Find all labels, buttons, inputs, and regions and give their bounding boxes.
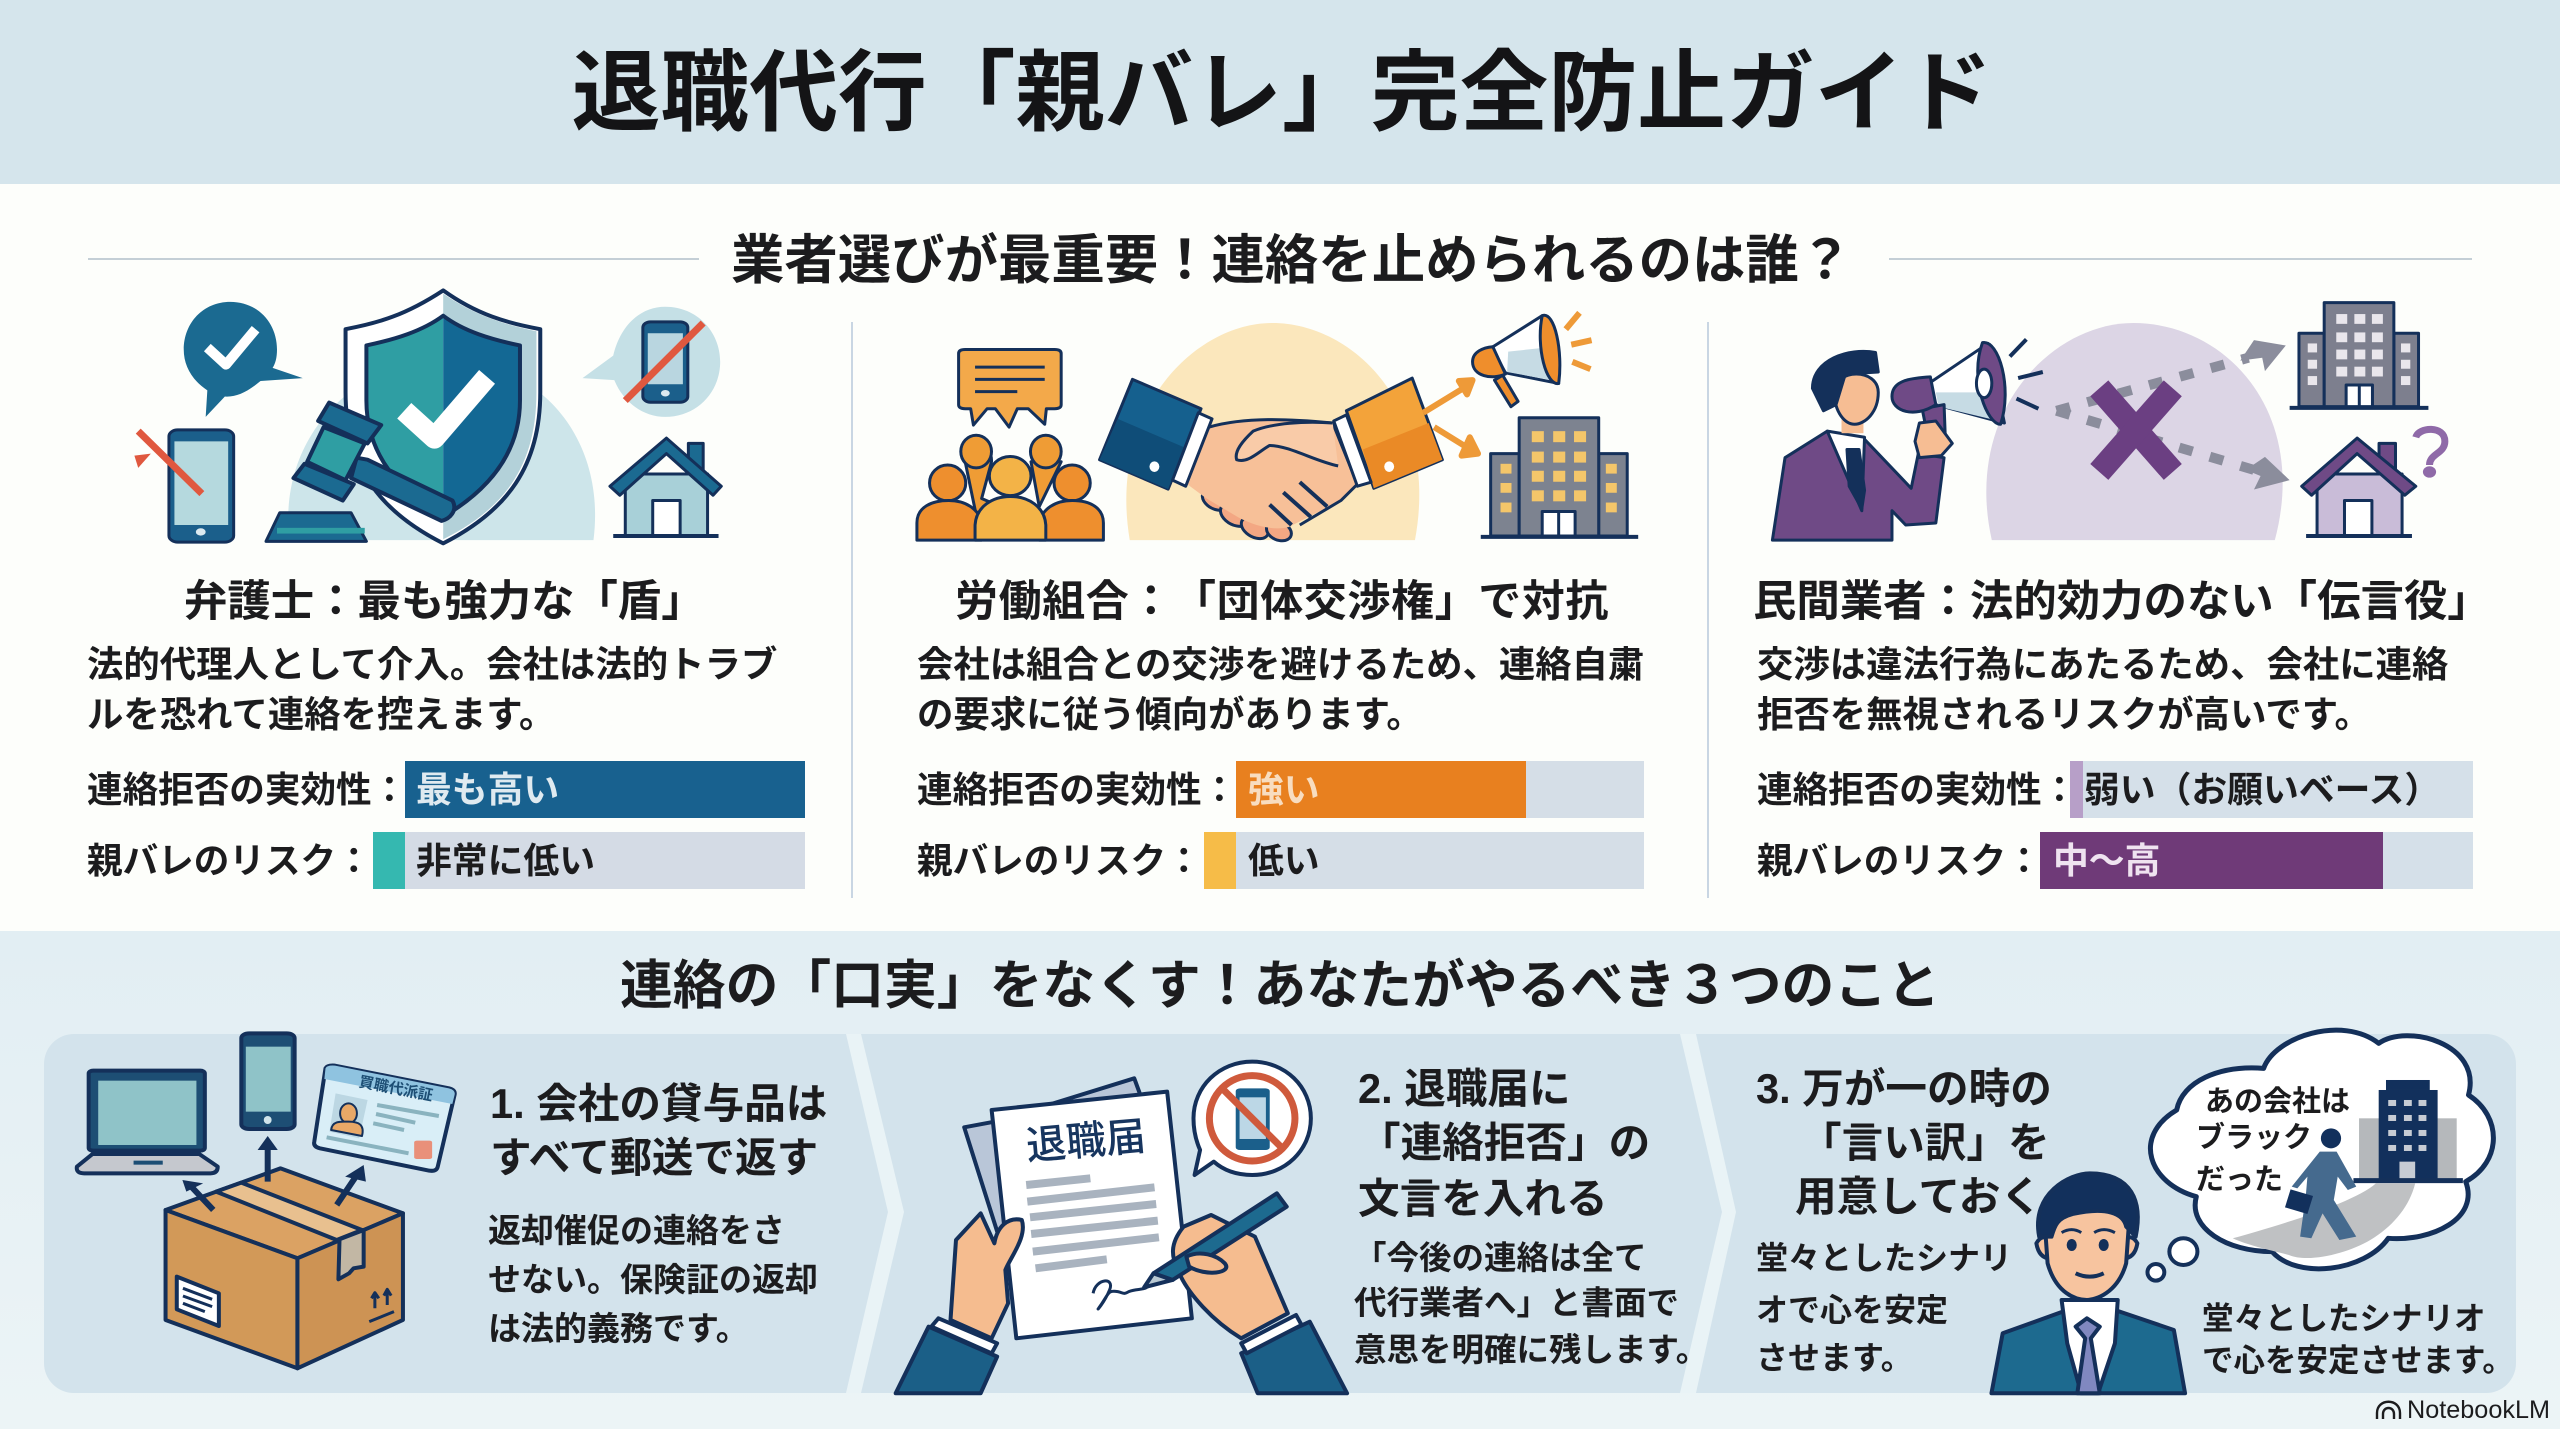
step 2: no-contact wording bbox=[896, 1062, 1708, 1393]
step 3: prepare an excuse bbox=[1756, 1030, 2514, 1393]
illustration: man with megaphone, blocked messages bbox=[1772, 303, 2445, 540]
step description: 意思を明確に残します。 bbox=[1354, 1332, 1708, 1368]
title: 退職代行「親バレ」完全防止ガイド bbox=[572, 44, 1992, 142]
panel heading: 労働組合：「団体交渉権」で対抗 bbox=[955, 578, 1609, 626]
meter: contact refusal: 連絡拒否の実効性： bbox=[87, 770, 407, 810]
meter: parent risk: 親バレのリスク： bbox=[917, 841, 1202, 881]
meter: contact refusal bbox=[917, 761, 1644, 818]
step 1: return loaned items bbox=[77, 1033, 827, 1368]
cloud text: あの会社は bbox=[2205, 1085, 2350, 1118]
illustration: box, laptop, phone, ID card bbox=[77, 1033, 455, 1368]
step title: 「言い訳」を bbox=[1800, 1118, 2050, 1166]
ID card label: 買職代派証 bbox=[357, 1074, 434, 1105]
meter: parent risk bbox=[1757, 832, 2473, 889]
meter: contact refusal: 連絡拒否の実効性： bbox=[917, 770, 1237, 810]
meter: contact refusal: 弱い（お願いベース） bbox=[2084, 770, 2440, 810]
description: の要求に従う傾向があります。 bbox=[917, 694, 1423, 734]
step description left: させます。 bbox=[1756, 1340, 1913, 1376]
panel heading: 民間業者：法的効力のない「伝言役」 bbox=[1753, 578, 2491, 626]
meter: parent risk: 中〜高 bbox=[2053, 841, 2160, 881]
illustration: thinking man with cloud bbox=[1991, 1030, 2493, 1393]
section heading: choosing a provider: 業者選びが最重要！連絡を止められるのは誰？ bbox=[731, 232, 1852, 290]
meter: parent risk: 非常に低い bbox=[416, 841, 595, 881]
meter: parent risk: 親バレのリスク： bbox=[1757, 841, 2042, 881]
steps band bbox=[44, 1034, 2516, 1393]
meter: parent risk: 低い bbox=[1248, 841, 1320, 881]
panel heading: 弁護士：最も強力な「盾」 bbox=[184, 578, 705, 626]
step title: 1. 会社の貸与品は bbox=[490, 1080, 827, 1126]
step description: は法的義務です。 bbox=[488, 1310, 749, 1346]
step title: 用意しておく bbox=[1795, 1172, 2042, 1220]
section: three things to do bbox=[0, 931, 2560, 1429]
meter: parent risk bbox=[917, 832, 1644, 889]
description: ルを恐れて連絡を控えます。 bbox=[87, 694, 555, 734]
cloud text: ブラック bbox=[2196, 1120, 2312, 1154]
step title: 3. 万が一の時の bbox=[1756, 1064, 2052, 1112]
step description: せない。保険証の返却 bbox=[488, 1260, 818, 1298]
meter: contact refusal bbox=[1757, 761, 2473, 818]
description: 拒否を無視されるリスクが高いです。 bbox=[1757, 694, 2371, 734]
panel: lawyer bbox=[87, 290, 805, 889]
cloud text: だった bbox=[2196, 1164, 2283, 1196]
step title: 文言を入れる bbox=[1358, 1174, 1608, 1222]
meter: parent risk: 親バレのリスク： bbox=[87, 841, 372, 881]
illustration: resignation letter, hands, no-phone bubble bbox=[896, 1062, 1347, 1393]
step title: 「連絡拒否」の bbox=[1359, 1118, 1650, 1166]
description: 交渉は違法行為にあたるため、会社に連絡 bbox=[1757, 644, 2448, 684]
step description: 代行業者へ」と書面で bbox=[1354, 1285, 1679, 1321]
step description: 返却催促の連絡をさ bbox=[488, 1212, 785, 1248]
document title: 退職届 bbox=[1024, 1115, 1148, 1169]
panel: private provider bbox=[1753, 303, 2491, 889]
NotebookLM watermark: NotebookLM bbox=[2407, 1396, 2550, 1424]
step title: すべて郵送で返す bbox=[490, 1134, 818, 1180]
step description right: 堂々としたシナリオ bbox=[2202, 1300, 2486, 1336]
step title: 2. 退職届に bbox=[1358, 1064, 1571, 1112]
step description right: で心を安定させます。 bbox=[2202, 1342, 2514, 1378]
illustration: handshake, crowd, megaphone, building bbox=[917, 313, 1638, 544]
meter: contact refusal bbox=[87, 761, 805, 818]
meter: contact refusal: 強い bbox=[1248, 770, 1320, 810]
description: 法的代理人として介入。会社は法的トラブ bbox=[87, 644, 777, 684]
section heading: 連絡の「口実」をなくす！あなたがやるべき３つのこと bbox=[620, 956, 1940, 1016]
title banner bbox=[0, 0, 2560, 184]
illustration: shield, gavel, phones, house bbox=[134, 290, 721, 543]
meter: parent risk bbox=[87, 832, 805, 889]
description: 会社は組合との交渉を避けるため、連絡自粛 bbox=[917, 644, 1644, 684]
step description left: 堂々としたシナリ bbox=[1756, 1240, 2012, 1276]
step description left: オで心を安定 bbox=[1756, 1292, 1948, 1328]
panel: labor union bbox=[917, 313, 1644, 889]
meter: contact refusal: 連絡拒否の実効性： bbox=[1757, 770, 2077, 810]
meter: contact refusal: 最も高い bbox=[416, 770, 559, 810]
step description: 「今後の連絡は全て bbox=[1354, 1240, 1647, 1276]
